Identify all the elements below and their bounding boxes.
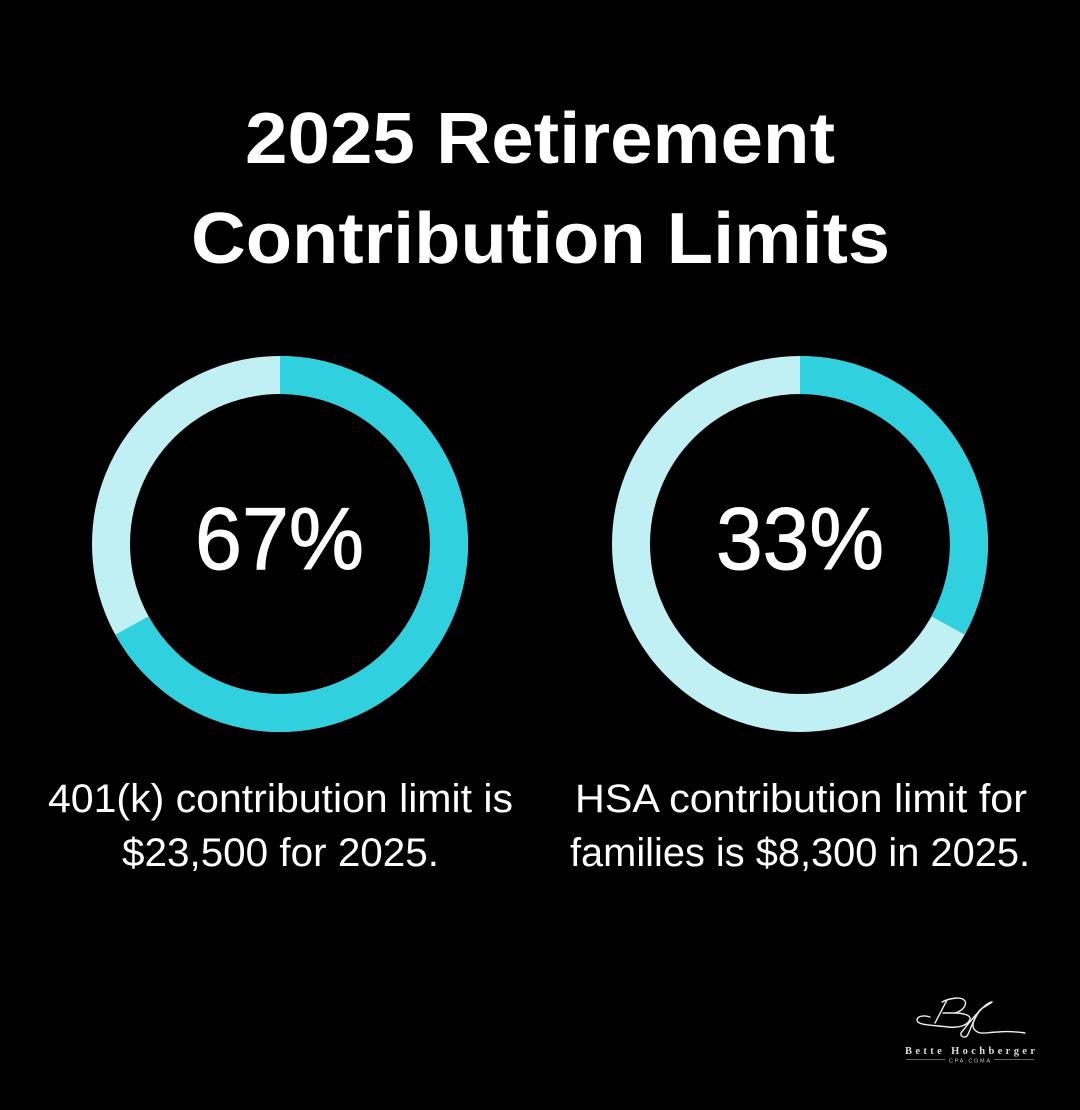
- caption: HSA limit: HSA contribution limit for: [575, 777, 1027, 821]
- caption: HSA limit: [570, 777, 1030, 875]
- donut value: 67%: 67%: [195, 489, 364, 588]
- title: 2025 Retirement: [245, 99, 835, 179]
- caption: HSA limit: families is $8,300 in 2025.: [570, 831, 1030, 875]
- signature mark: [917, 998, 1025, 1037]
- donut chart: HSA 33%: [631, 375, 969, 713]
- caption: 401(k) limit: [48, 777, 513, 875]
- logo credential: CPA,CGMA: [949, 1058, 990, 1064]
- donut chart: 401(k) 67%: [111, 375, 449, 713]
- donut value: 33%: 33%: [716, 489, 884, 588]
- logo: Bette Hochberger signature: [905, 998, 1035, 1064]
- logo credential rule: [906, 1059, 1034, 1061]
- title: Contribution Limits: [191, 199, 890, 279]
- caption: 401(k) limit: 401(k) contribution limit is: [48, 777, 513, 821]
- logo name: Bette Hochberger: [905, 1046, 1035, 1057]
- title: [191, 99, 890, 279]
- caption: 401(k) limit: $23,500 for 2025.: [122, 831, 439, 875]
